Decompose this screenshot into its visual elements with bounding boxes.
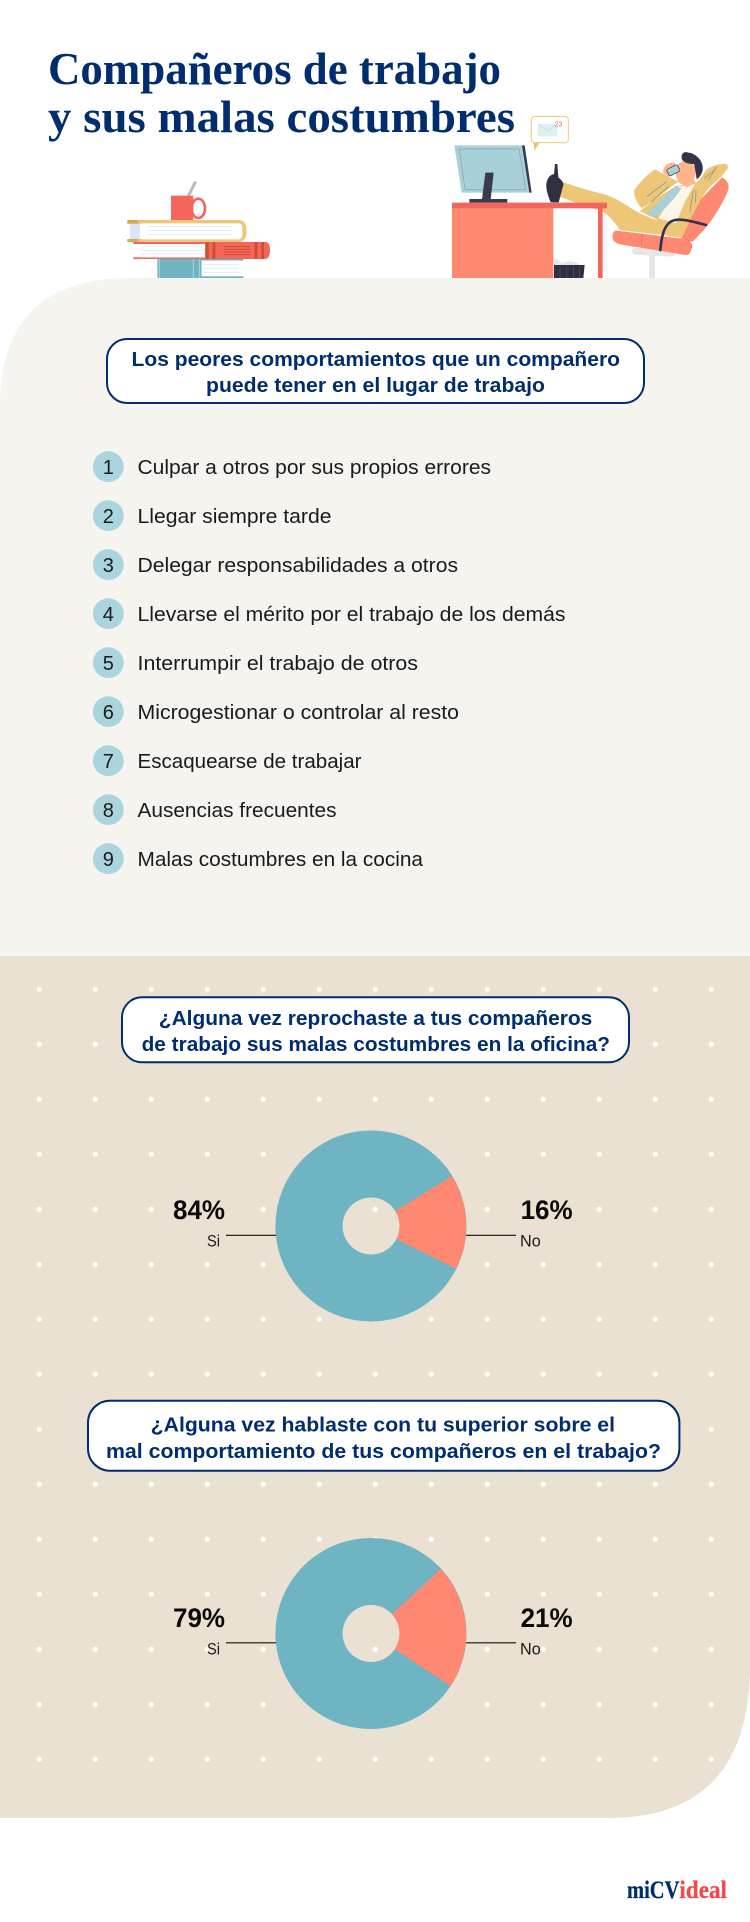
label: 21% no: 21%: [521, 1603, 573, 1633]
list item 2: [93, 500, 332, 531]
icon: teal book: [157, 259, 243, 279]
list item 5: Interrumpir el trabajo de otros: [138, 653, 418, 675]
list item 2: Llegar siempre tarde: [138, 506, 332, 528]
heading: question 1: ¿Alguna vez reprochaste a tus compañeros: [159, 1007, 592, 1030]
label: 84% si: [173, 1195, 276, 1251]
icon: yellow book: [127, 220, 247, 242]
list item 6: [93, 696, 459, 727]
heading: question 2: mal comportamiento de tus compañeros en el trabajo?: [106, 1440, 661, 1463]
list item 2: 2: [103, 506, 114, 528]
list item 8: Ausencias frecuentes: [138, 800, 336, 822]
title: [48, 43, 515, 142]
icon: speech bubble with envelope: 23: [555, 122, 563, 129]
illustration: man at desk: [452, 116, 729, 278]
label: 84% si: Si: [207, 1232, 220, 1251]
logo: ideal: [679, 1877, 727, 1904]
list item 6: Microgestionar o controlar al resto: [138, 702, 459, 724]
donut chart: question 1: [275, 1130, 466, 1322]
list item 3: 3: [103, 555, 114, 577]
head, hair, hand and phone: [663, 152, 703, 187]
list item 9: 9: [103, 849, 114, 871]
list item 4: 4: [103, 604, 114, 626]
list item 7: Escaquearse de trabajar: [138, 751, 362, 773]
list item 6: 6: [103, 702, 114, 724]
list item 1: Culpar a otros por sus propios errores: [138, 457, 491, 479]
heading: question 2: ¿Alguna vez hablaste con tu superior sobre el: [151, 1414, 615, 1437]
heading: worst behaviours: Los peores comportamientos que un compañero: [132, 348, 620, 371]
list item 5: [93, 647, 418, 678]
icon: mug: [171, 196, 205, 220]
list item 1: 1: [103, 457, 114, 479]
list item 7: [93, 745, 362, 776]
label: 16% no: [466, 1195, 573, 1251]
title: Compañeros de trabajo: [48, 43, 501, 94]
label: 16% no: 16%: [521, 1195, 573, 1225]
icon: monitor: [454, 145, 532, 203]
heading: question 1: [122, 997, 629, 1062]
label: 79% si: Si: [207, 1640, 220, 1658]
heading: worst behaviours: puede tener en el lugar de trabajo: [206, 374, 545, 397]
list item 8: [93, 794, 337, 825]
icon: trash bin: [554, 258, 585, 278]
heading: question 2: [88, 1401, 679, 1471]
armrest: [660, 220, 706, 250]
label: 79% si: [173, 1603, 276, 1658]
label: 79% si: 79%: [173, 1603, 225, 1633]
icon: spoon: [188, 183, 195, 196]
heading: question 1: de trabajo sus malas costumbres en la oficina?: [142, 1033, 610, 1056]
numbered list: [93, 451, 566, 874]
list item 5: 5: [103, 653, 114, 675]
illustration: books and mug: [127, 183, 270, 279]
list item 7: 7: [103, 751, 114, 773]
icon: speech bubble with envelope: [531, 116, 568, 151]
chair back and seat: [612, 177, 729, 255]
heading: worst behaviours: [107, 339, 644, 403]
donut chart: question 2: [275, 1538, 466, 1729]
panel: survey results: [0, 956, 750, 1818]
list item 9: [93, 843, 424, 874]
logo: miCV: [627, 1877, 679, 1904]
chair post and base: [632, 248, 675, 278]
icon: red book: [133, 242, 270, 259]
label: 84% si: 84%: [173, 1195, 225, 1225]
list item 8: 8: [103, 800, 114, 822]
list item 3: Delegar responsabilidades a otros: [138, 555, 458, 577]
list item 4: [93, 598, 566, 629]
label: 16% no: No: [520, 1232, 541, 1251]
trousers: [559, 182, 683, 238]
label: 21% no: No: [520, 1640, 541, 1658]
logo: [627, 1877, 727, 1904]
icon: shoe: [546, 164, 563, 202]
title: y sus malas costumbres: [48, 91, 515, 142]
jacket: [634, 164, 728, 238]
icon: chair and man: [559, 152, 729, 278]
panel: worst behaviours: [0, 278, 750, 956]
list item 9: Malas costumbres en la cocina: [138, 849, 424, 871]
label: 21% no: [466, 1603, 573, 1658]
list item 3: [93, 549, 458, 580]
list item 4: Llevarse el mérito por el trabajo de los demás: [138, 604, 566, 626]
list item 1: [93, 451, 491, 482]
icon: desk: [452, 203, 607, 278]
